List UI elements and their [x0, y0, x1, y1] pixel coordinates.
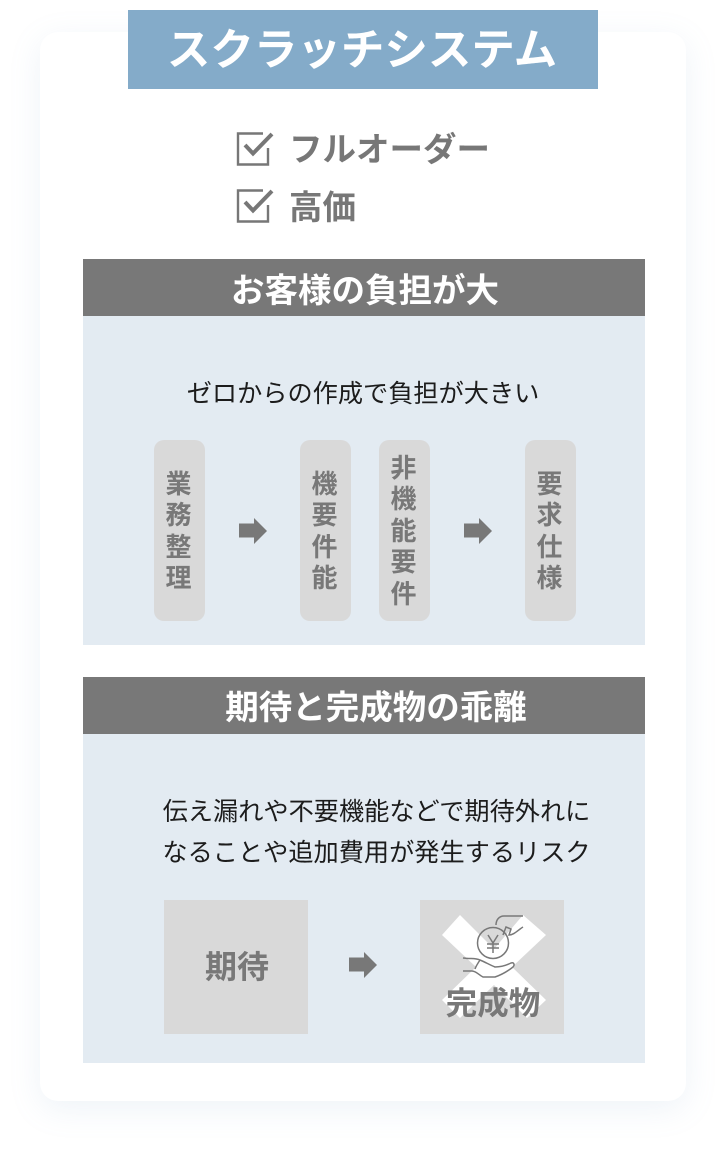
process step text: functional requirements	[311, 468, 338, 593]
icon: cross and money hand	[442, 915, 546, 1018]
process step text: non-functional requirements: 能	[390, 516, 416, 546]
process step text: requirement specification: 求	[536, 500, 562, 530]
box: finished product with cross	[420, 900, 564, 1034]
process step text: functional requirements: 能	[311, 563, 338, 593]
process step text: business analysis: 理	[165, 563, 192, 593]
process step text: business analysis: 務	[165, 500, 192, 530]
process step text: business analysis: 業	[165, 468, 192, 498]
process step text: requirement specification: 様	[536, 563, 562, 593]
process step text: functional requirements: 要	[311, 500, 338, 530]
section heading bar: customer burden	[83, 259, 645, 316]
panel: customer burden	[83, 316, 645, 645]
title banner background	[128, 10, 598, 89]
process step text: business analysis: 整	[165, 532, 192, 562]
section heading: expectation gap: 期待と完成物の乖離	[225, 690, 527, 727]
process step text: business analysis	[165, 468, 192, 593]
label: 高価	[289, 190, 356, 227]
section heading bar: expectation gap	[83, 677, 645, 734]
process step box: requirement specification	[525, 440, 576, 621]
panel: expectation gap	[83, 734, 645, 1063]
arrow	[239, 518, 267, 544]
process step text: non-functional requirements: 機	[390, 484, 416, 514]
arrow	[349, 952, 377, 978]
process step text: requirement specification: 仕	[536, 532, 562, 562]
process step text: functional requirements: 機	[311, 468, 338, 498]
arrow	[464, 518, 492, 544]
process step text: requirement specification	[536, 468, 562, 593]
process step box: business analysis	[154, 440, 205, 621]
label: フルオーダー	[289, 132, 490, 169]
burden description: ゼロからの作成で負担が大きい	[187, 380, 539, 408]
process step text: non-functional requirements: 非	[390, 453, 416, 483]
checklist item: high price	[236, 189, 356, 227]
box: expectation: 期待	[205, 949, 269, 985]
gap description	[162, 798, 591, 866]
process step box: functional requirements	[300, 440, 351, 621]
section heading: customer burden: お客様の負担が大	[231, 273, 499, 310]
process step text: non-functional requirements: 件	[390, 579, 416, 609]
process step text: non-functional requirements: 要	[390, 547, 416, 577]
title: スクラッチシステム	[167, 27, 557, 75]
icon: checkbox	[236, 132, 274, 166]
label: 完成物	[446, 985, 540, 1021]
process step text: non-functional requirements	[390, 453, 416, 609]
box: expectation	[164, 900, 308, 1034]
checklist item: full order	[236, 132, 490, 169]
process step text: functional requirements: 件	[311, 532, 338, 562]
process step text: requirement specification: 要	[536, 468, 562, 498]
gap description: 伝え漏れや不要機能などで期待外れに	[163, 798, 590, 826]
gap description: なることや追加費用が発生するリスク	[162, 838, 591, 866]
process step box: non-functional requirements	[379, 440, 430, 621]
icon: checkbox	[236, 189, 274, 223]
